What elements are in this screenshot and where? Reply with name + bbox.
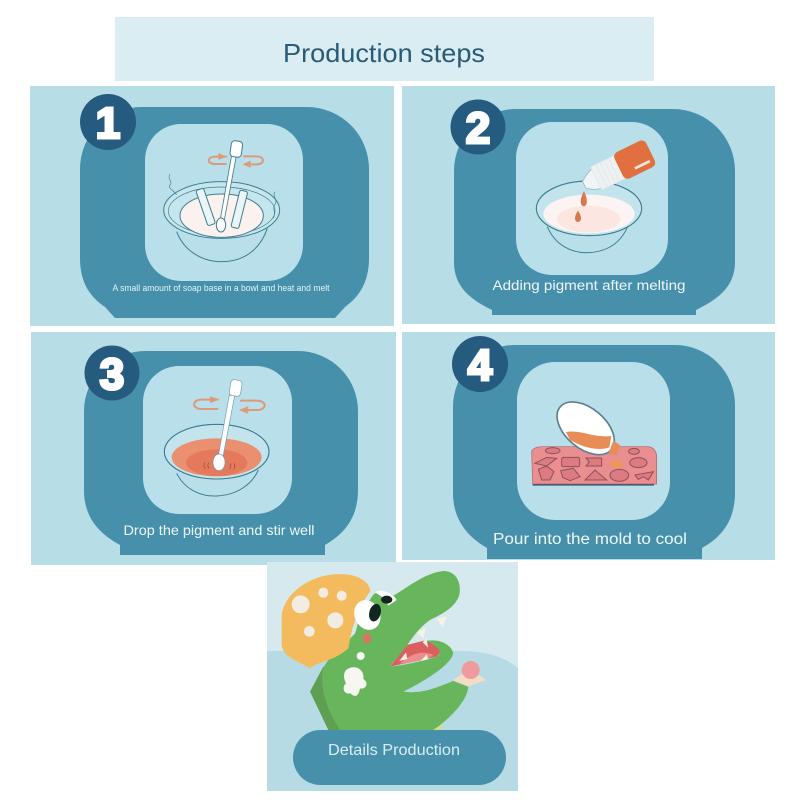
step 1 number badge — [80, 94, 136, 150]
button: details production — [293, 730, 506, 785]
step 3 number badge — [84, 346, 140, 400]
illustration: bowl melting soap base — [164, 140, 280, 262]
panel: step 1 — [30, 86, 394, 326]
illustration: crocodile with mushroom cap — [282, 571, 486, 730]
step 1 number badge: 1 — [96, 99, 120, 148]
title banner — [115, 17, 654, 81]
illustration: stirring pigment in bowl — [164, 379, 269, 496]
button: details production: Details Production — [328, 742, 460, 759]
step 3 caption: Drop the pigment and stir well — [124, 522, 314, 538]
step 4 number badge — [452, 336, 508, 392]
panel: step 2 — [402, 86, 775, 324]
step 2 number badge — [450, 100, 506, 154]
title banner: Production steps — [283, 38, 485, 68]
illustration: pouring into mold — [532, 392, 657, 486]
step 4 number badge: 4 — [468, 341, 493, 390]
step 4 caption: Pour into the mold to cool — [493, 531, 687, 548]
step 3 number badge: 3 — [100, 350, 124, 399]
illustration: bottle dropping pigment into bowl — [536, 139, 657, 253]
panel: step 3 — [31, 332, 396, 565]
panel: step 4 — [402, 332, 775, 560]
step 2 number badge: 2 — [466, 104, 490, 153]
panel: crocodile mascot — [267, 562, 518, 791]
step 2 caption: Adding pigment after melting — [492, 277, 686, 293]
step 1 caption: A small amount of soap base in a bowl and heat and melt — [112, 283, 330, 294]
